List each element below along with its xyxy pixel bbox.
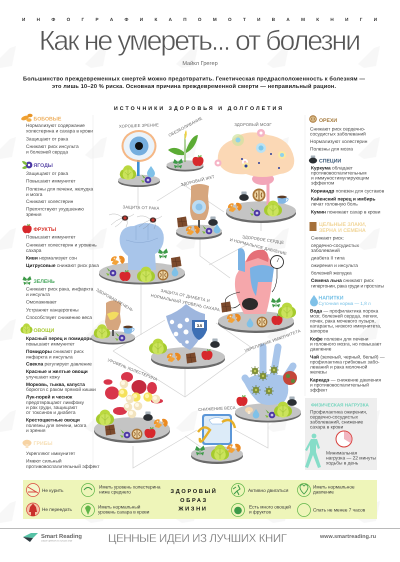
connector lines [113,183,268,468]
text block: холестерина и сахара в крови [26,130,93,134]
panel: nuts [309,115,368,152]
text block: сосудистых заболеваний [310,132,366,138]
item: cholesterol below average: ниже среднего [99,490,131,494]
icon: clock chart [336,431,352,447]
section heading: ИСТОЧНИКИ ЗДОРОВЬЯ И ДОЛГОЛЕТИЯ [114,106,282,112]
panel: healthy lifestyle band [23,480,377,519]
footer divider [0,527,400,530]
item: fruits and vegetables: и фруктов [249,510,271,514]
label: normal pressure: И НОРМАЛЬНОЕ ДАВЛЕНИЕ [229,237,288,256]
icon: bread [310,222,316,231]
plate: weight loss [191,414,243,464]
text block: Устраняет канцерогены [26,308,79,314]
text block: Куркума обладает [311,166,353,172]
text block: лечат головную боль [311,202,358,208]
text block: борются с раком прямой кишки [26,387,96,393]
label: good vision: ХОРОШЕЕ ЗРЕНИЕ [119,122,159,129]
heading: ОРЕХИ [319,118,337,124]
heading: ЗЕЛЕНЬ [34,279,55,285]
text block: и инсульта [26,293,50,298]
plate: healthy liver [91,300,135,344]
text block: заболеваний [311,248,340,254]
plate: healthy heart [218,248,296,333]
icon: beans [21,114,33,122]
plate: immunity [235,347,301,422]
plate: cancer protection [99,214,185,284]
text block: предотвращают лимфому [26,400,85,406]
footer slogan: ЦЕННЫЕ ИДЕИ ИЗ ЛУЧШИХ КНИГ [108,533,288,545]
item: sleep: Спать не менее 7 часов [313,508,366,512]
label: healthy brain: ЗДОРОВЫЙ МОЗГ [234,122,272,127]
text block: противовоспалительный эффект [26,464,100,470]
text block: повышают иммунитет [26,342,76,348]
plate: eye [118,130,160,187]
icon: herb [22,276,32,285]
icon: berries [22,161,32,169]
caption: нагрузка — 22 минуты [326,456,377,462]
plate: cholesterol [94,372,170,443]
item: no overeating [26,503,73,516]
icon: cabbage [20,323,32,334]
text block: и иммуностимулирующим [311,176,369,182]
text block: болезней желудка [311,270,352,276]
heading: ФРУКТЫ [34,227,56,233]
panel: drinks [310,295,385,394]
text block: Препятствуют ухудшению [26,206,84,212]
icon: walking person [305,434,321,468]
text block: леваний и рака молочной [310,364,368,370]
text block: противовоспалительным [311,172,367,176]
text block: от токсинов и диабета [26,410,76,416]
text block: Семена льна снижают риск [311,279,374,284]
text block: и болезней сердца [26,150,68,156]
text block: сердечно-сосудистых [311,244,360,249]
panel: mushrooms [22,440,100,470]
text block: Защищают от рака [26,136,68,142]
icon: mushroom [22,440,32,448]
text block: сердечно-сосудистых [310,416,359,420]
text block: зрения [26,213,42,218]
label: healthy heart: ЗДОРОВОЕ СЕРДЦЕ [242,234,285,245]
text block: инфаркта и инсульта [26,354,73,360]
heading: ОБРАЗ [180,498,208,504]
label: cholesterol level: УРОВЕНЬ ХОЛЕСТЕРИНА [107,357,158,382]
item: normal blood sugar [82,504,150,516]
heading: ОВОЩИ [34,328,54,334]
text block: Лук-порей и чеснок [26,394,73,400]
caption: Минимальная [326,450,358,456]
text block: Помидоры снижают риск [26,350,84,355]
text block: ожирения и инсульта [311,264,358,269]
text block: Омолаживает [26,300,58,306]
logo: Smart Reading [23,533,82,542]
title: Как не умереть... от болезни [39,25,361,56]
logo: Smart Reading: самое ценное из лучших книг [41,540,73,542]
label: pain relief: ОБЕЗБОЛИВАНИЕ [167,116,203,138]
item: stay active [232,484,289,496]
icon: walnut [309,115,317,123]
icon: apple [22,224,32,233]
heading: ГРИБЫ [34,441,52,447]
label: healthy digestion: ЗДОРОВЫЙ ЖКТ [180,174,215,187]
text block: Укрепляют иммунитет [26,451,76,457]
item: cholesterol below average [82,484,161,496]
heading: ЗЕРНА И СЕМЕНА [319,228,366,234]
text block: Снижают холестерин [26,199,74,205]
label: normal blood sugar: НОРМАЛЬНЫЙ УРОВЕНЬ САХАРА [150,293,220,312]
label: cancer protection: ЗАЩИТА ОТ РАКА [123,204,160,211]
plate: pain relief [166,130,204,172]
text block: Повышают иммунитет [26,178,76,184]
text block: Кориандр полезен для суставов [311,190,384,194]
heading: ЦЕЛЬНЫЕ ЗЛАКИ, [319,222,367,228]
text block: давление [310,348,332,352]
panel: spices [309,155,385,216]
website: www.smartreading.ru [319,534,376,540]
text block: Красные и желтые овощи [26,369,88,375]
label: diabetes protection: ЗАЩИТА ОТ ДИАБЕТА И [160,288,210,303]
text block: Снижают риск инсульта [26,144,79,150]
panel: berries [22,161,94,218]
plate: digestive tract [176,184,222,240]
text block: Снижают риск: [311,236,344,242]
panel: fruits [22,224,99,269]
icon: spice jar [309,155,317,163]
text block: Чай (зеленый, черный, белый) — [310,356,385,360]
text block: Полезны для мозга [310,146,353,152]
author: Майкл Грегер [182,60,218,67]
text block: полезны для печени, мозга [26,424,87,429]
text block: Красный перец и помидоры [26,336,93,342]
heading: СПЕЦИИ [319,158,341,164]
panel: vegetables [20,323,96,434]
heading: ЖИЗНИ [177,506,208,512]
text block: эффектом [311,180,334,186]
text block: Снижают холестерин и уровень [26,242,97,248]
item: normal pressure: Иметь нормальное [313,484,355,490]
text block: Нормализуют содержание [26,123,85,129]
text block: Свекла регулирует давление [26,362,92,368]
text block: Кайенский перец и имбирь [311,196,375,202]
text block: профилактика грибковых забо- [310,360,380,366]
plate: diabetes protection [149,304,225,369]
item: no smoking [26,484,64,496]
plate: diabetes protection: 3.5 [197,324,202,328]
plate: brain [214,129,296,223]
text block: Имеют сильный [26,458,62,464]
heading: ЯГОДЫ [34,163,53,169]
text block: улучшают кожу [26,376,61,380]
text block: Повышают иммунитет [26,234,76,240]
text block: и противовоспалительный [310,382,369,388]
text block: Снижают риск сердечно- [310,126,366,132]
item: sleep [298,504,366,516]
text block: Каркадэ — снижение давления [310,378,381,384]
text block: эффект [310,388,328,394]
text block: Профилактика ожирения, [310,410,367,416]
text block: и мозга [26,193,43,198]
text block: сахара [26,249,42,254]
text block: железы [310,370,327,376]
item: no overeating: Не переедать [42,507,73,512]
text block: Кофе полезен для печени [310,338,368,342]
text block: мозг, болезней сердца, легких, [310,314,378,320]
heading: НАПИТКИ [318,296,344,302]
caption: ходьбы в день [326,460,359,466]
logo: Smart Reading: Smart Reading [41,533,82,540]
text block: и зрения [26,429,46,434]
text block: катаракты, низкого иммунитета, [310,324,381,330]
intro paragraph: Большинство преждевременных смертей можно предотвратить. Генетическая предрасположенность к болезням — [23,76,365,82]
item: stay active: Активно двигаться [248,488,289,493]
text block: Крестоцветные овощи [26,418,80,424]
text block: заболеваний, снижение [310,420,363,426]
text block: Защищают от рака [26,171,68,177]
text block: Морковь, тыква, капуста [26,382,85,388]
text block: Вода — профилактика порока [310,310,378,314]
text block: Снижают риск рака, инфаркта [26,286,94,292]
text block: Нормализуют холестерин [310,139,368,145]
label: weight loss: СНИЖЕНИЕ ВЕСА [198,405,236,412]
text block: сахара в крови [310,426,344,430]
item: fruits and vegetables: Есть много овощей [249,504,291,510]
item: normal pressure [298,484,355,496]
text block: гипертонии, рака груди и простаты [311,284,385,290]
label: healthy liver: ЗДОРОВАЯ ПЕЧЕНЬ [95,287,134,312]
text block: Способствует снижению веса [26,315,92,321]
item: cholesterol below average: Иметь уровень холестерина [99,484,161,490]
item: normal pressure: давление [313,490,334,494]
heading: ФИЗИЧЕСКАЯ НАГРУЗКА [311,402,369,408]
daily norm: Суточная норма — 1,8 л [318,301,371,306]
label: stronger immunity: УКРЕПЛЕНИЕ ИММУНИТЕТА [244,328,301,353]
panel: legumes [21,114,93,156]
text block: почек, рака мочевого пузыря, [310,320,376,324]
icon: water drop [310,295,318,306]
item: normal blood sugar: уровень сахара в крови [98,510,150,514]
top kicker: И Н Ф О Г Р А Ф И К А П О М О Т И В А М К Н И Г И [22,17,377,22]
text block: Кумин понижает сахар в крови [311,210,380,216]
item: no smoking: Не курить [42,488,64,493]
text block: Полезны для печени, желудка [26,186,94,192]
text block: запоров [310,330,328,334]
text block: и головного мозга, но повышает [310,342,382,348]
heading: ЗДОРОВЫЙ [170,487,218,495]
heading: БОБОВЫЕ [34,117,62,123]
item: normal blood sugar: Иметь нормальный [98,504,141,510]
text block: Киви нормализует сон [26,256,77,262]
text block: Цитрусовые снижают риск рака [26,264,99,269]
item: fruits and vegetables [232,504,291,516]
text block: и рак груди, защищают [26,406,78,411]
panel: greens [22,276,94,321]
panel: whole grains [310,222,385,290]
intro paragraph: это лишь 10–20 % риска. Основная причина преждевременной смерти — неправильный рацион. [52,83,336,90]
text block: диабета II типа [311,256,345,262]
panel: physical activity [305,398,377,470]
